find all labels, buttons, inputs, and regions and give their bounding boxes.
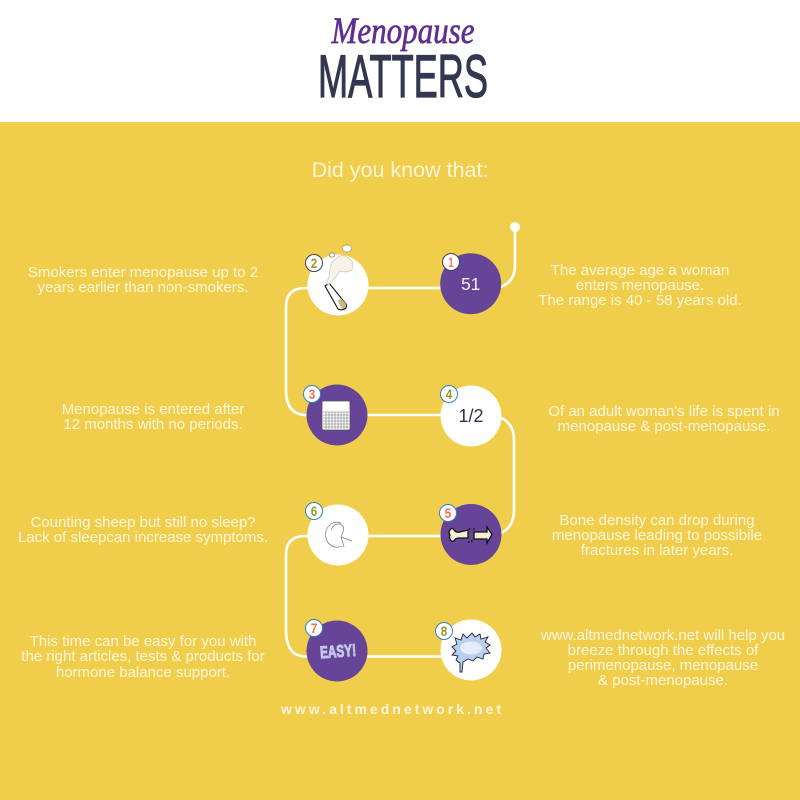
step 5: 5 [445, 505, 451, 521]
step 6 [306, 502, 368, 566]
step 1 [440, 253, 501, 314]
text: website help: & post-menopause. [598, 672, 728, 689]
icon: calendar [322, 401, 350, 430]
text: website help: www.altmednetwork.net will help you [540, 627, 785, 644]
text: half of life: menopause & post-menopause. [558, 418, 770, 435]
text: bone density: menopause leading to possibile [552, 527, 762, 544]
text: website help: perimenopause, menopause [568, 657, 758, 674]
text: bone density: Bone density can drop during [559, 512, 755, 529]
step 8: 8 [441, 623, 447, 639]
step 1: 1 [448, 254, 454, 270]
path start dot [510, 222, 520, 232]
step 5 [440, 504, 502, 565]
icon: speech burst [452, 633, 490, 672]
connector path [286, 227, 515, 656]
text: average age: The average age a woman [551, 262, 729, 279]
text: average age: enters menopause. [576, 277, 704, 294]
text: half of life: Of an adult woman's life is spent in [548, 403, 780, 420]
text: sleep: Lack of sleepcan increase symptoms. [18, 529, 268, 546]
step 2 [306, 245, 368, 316]
title: MATTERS [318, 43, 488, 110]
step 1: 51 [461, 274, 480, 294]
step 4: 1/2 [458, 406, 484, 426]
text: easy time: This time can be easy for you with [30, 633, 256, 650]
text: average age: The range is 40 - 58 years old. [538, 292, 742, 309]
icon: cigarette [325, 245, 353, 310]
title [318, 11, 488, 110]
title: Menopause [331, 11, 474, 52]
step 3 [304, 384, 368, 446]
footer url: www.altmednetwork.net [280, 701, 501, 717]
step 4 [440, 386, 502, 446]
step 8 [436, 620, 502, 680]
text: sleep: Counting sheep but still no sleep? [30, 514, 256, 531]
text: periods: 12 months with no periods. [63, 416, 243, 433]
text: periods: Menopause is entered after [62, 401, 244, 418]
step 4: 4 [446, 386, 452, 402]
step 7: 7 [311, 620, 317, 636]
icon: sleeping sheep [326, 522, 352, 547]
text: bone density: fractures in later years. [581, 542, 733, 559]
step 6: 6 [311, 503, 317, 519]
text: easy time: hormone balance support. [56, 664, 230, 681]
text: smokers: years earlier than non-smokers. [38, 279, 248, 296]
step 2: 2 [311, 255, 317, 271]
subheading: Did you know that: [312, 158, 488, 182]
text: website help: breeze through the effects of [568, 642, 759, 659]
step 7 [306, 620, 368, 682]
text: easy time: the right articles, tests & products for [21, 648, 265, 665]
icon: broken bone and arrow [449, 527, 492, 543]
step 3: 3 [309, 386, 315, 402]
icon: easy label: EASY! [319, 641, 357, 662]
text: smokers: Smokers enter menopause up to 2 [28, 264, 258, 281]
